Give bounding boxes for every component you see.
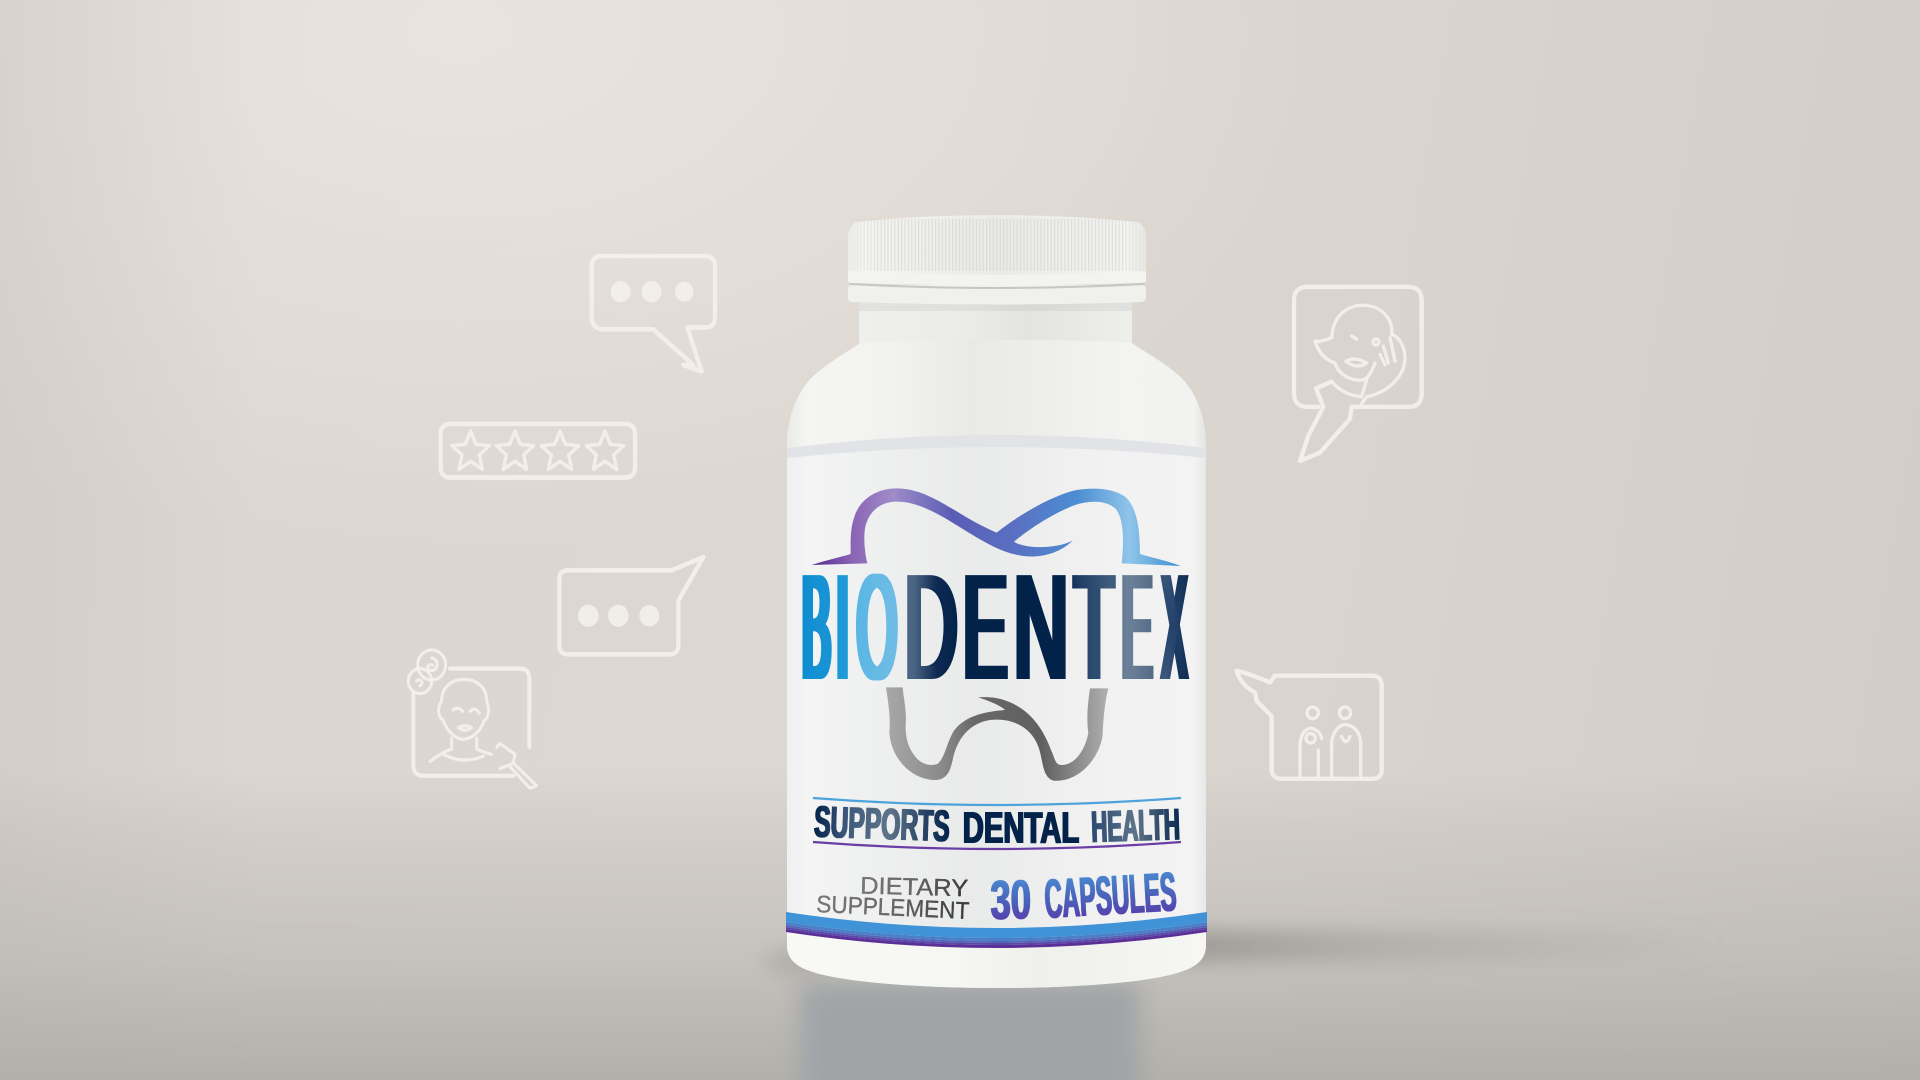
tagline: SUPPORTS DENTAL HEALTH: SUPPORTS [813,797,951,851]
neck shadow [859,302,1132,311]
logo: tooth crown arc [812,488,1181,566]
logo: BIODENTEX wordmark: D [905,544,957,709]
label panel [787,435,1206,938]
text: HEALTH [1090,799,1181,851]
capsule count [990,861,1178,931]
icon: face with toothache [1294,287,1422,461]
floor reflection under bottle [800,982,1140,1080]
text: T [1074,544,1114,709]
bottle neck [859,296,1132,351]
icon: person with magnifier [408,650,537,788]
left floating icons [408,256,715,788]
capsule count: 30 [990,869,1032,931]
label base stripe [786,912,1207,948]
logo: BIODENTEX wordmark: B [802,544,831,709]
icon: speech bubble right tail [559,557,703,654]
text: CAPSULES [1043,861,1178,930]
text: N [1014,544,1068,709]
bottle shadow [764,930,1720,976]
dietary supplement text [816,873,970,925]
dietary supplement text: DIETARY [860,873,969,902]
right floating icons [1237,287,1422,779]
cap lower ring [848,285,1146,304]
icon: family box [1237,671,1382,779]
icon: speech bubble with dots [592,256,715,371]
label top stripe [787,435,1206,458]
cap [848,215,1146,283]
dietary supplement text: SUPPLEMENT [816,891,970,925]
bottle [786,215,1207,988]
cap groove [850,284,1144,288]
logo: BIODENTEX wordmark: E [963,544,1007,709]
cap ribbing [850,219,1144,271]
tagline: SUPPORTS DENTAL HEALTH: DENTAL [963,803,1079,852]
text: E [1122,544,1152,709]
cap lip [848,271,1146,286]
tagline rule bottom [813,842,1181,849]
logo: BIODENTEX wordmark: I [837,544,848,709]
bottle base [787,925,1206,988]
logo: tooth roots [886,687,1108,781]
tagline: SUPPORTS DENTAL HEALTH [813,797,1181,852]
bottle body [787,340,1206,988]
icon: star rating [441,424,635,477]
text: X [1162,544,1187,709]
logo: BIODENTEX wordmark: O [857,544,897,709]
tagline rule top [813,798,1181,805]
